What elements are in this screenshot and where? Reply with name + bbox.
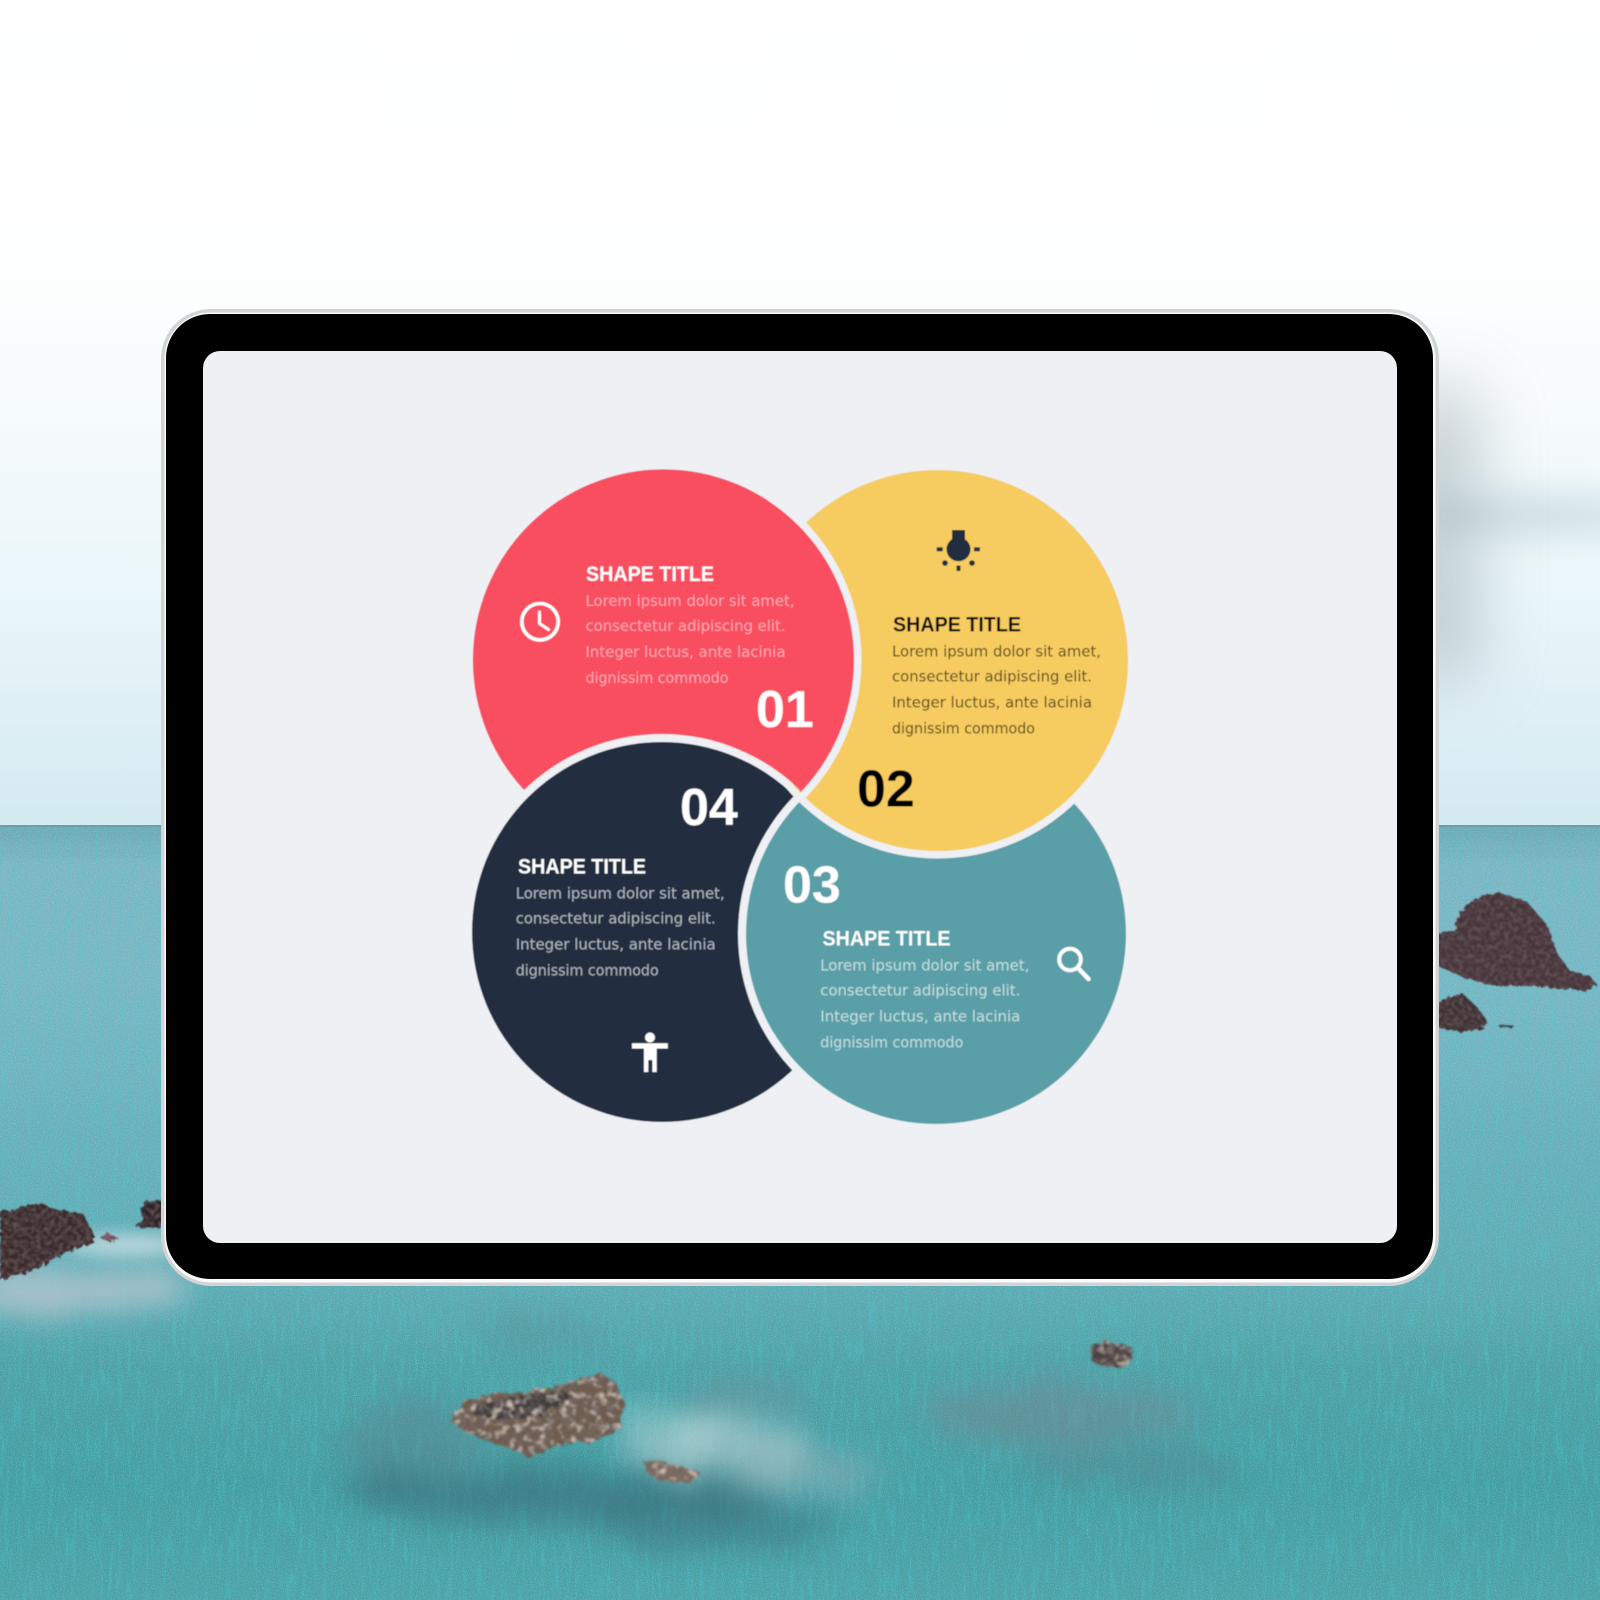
body text 03 <box>820 957 1029 1052</box>
sea gradient <box>0 825 1600 1600</box>
distant water band <box>0 852 1600 856</box>
number 04: 04 <box>680 779 738 837</box>
icon: clock <box>522 604 558 640</box>
number 02: 02 <box>857 760 915 818</box>
body text 03: dignissim commodo <box>820 1034 963 1052</box>
body text 03: Integer luctus, ante lacinia <box>820 1008 1020 1026</box>
section 04 content <box>516 779 738 1072</box>
body text 04: Lorem ipsum dolor sit amet, <box>516 885 725 903</box>
device outer rim <box>161 309 1439 1286</box>
body text 01: consectetur adipiscing elit. <box>586 617 786 635</box>
body text 02: dignissim commodo <box>892 720 1035 738</box>
body text 04: Integer luctus, ante lacinia <box>516 936 716 954</box>
title 04: SHAPE TITLE <box>518 856 646 879</box>
water mist and shadows <box>0 1234 1240 1551</box>
body text 02: consectetur adipiscing elit. <box>892 668 1092 686</box>
rocks: left shore <box>0 1200 162 1280</box>
section 02 content <box>857 530 1101 818</box>
body text 03: consectetur adipiscing elit. <box>820 982 1020 1000</box>
body text 01: Integer luctus, ante lacinia <box>586 643 786 661</box>
body text 01 <box>586 592 794 687</box>
circle 01 base <box>473 470 854 850</box>
icon: light bulb <box>937 530 980 571</box>
body text 02: Integer luctus, ante lacinia <box>892 694 1092 712</box>
number 01: 01 <box>756 681 814 739</box>
device inner rim <box>164 312 1436 1282</box>
body text 04: consectetur adipiscing elit. <box>516 910 716 928</box>
circle 02 base <box>740 462 1136 858</box>
rocks: central foreground <box>450 1341 1132 1482</box>
body text 04 <box>516 885 725 980</box>
horizon line <box>0 825 1600 827</box>
circle 03 base <box>738 736 1134 1132</box>
rocks: right shore <box>1438 892 1596 1032</box>
device bezel <box>166 314 1433 1279</box>
section 03 content <box>783 856 1088 1052</box>
body text 01: Lorem ipsum dolor sit amet, <box>586 592 794 610</box>
body text 04: dignissim commodo <box>516 962 659 980</box>
fog band and device shadow on the right <box>1400 390 1600 680</box>
background: misty sea photograph <box>0 337 1600 1600</box>
body text 01: dignissim commodo <box>586 669 728 687</box>
circle 01 overlap above circle 02 <box>738 500 862 798</box>
body text 02: Lorem ipsum dolor sit amet, <box>892 642 1101 660</box>
water texture <box>0 827 1600 1600</box>
body text 03: Lorem ipsum dolor sit amet, <box>820 957 1029 975</box>
title 02: SHAPE TITLE <box>893 614 1021 636</box>
icon: magnifying glass <box>1059 949 1088 979</box>
icon: person <box>632 1032 668 1072</box>
sky gradient <box>0 0 1600 826</box>
number 03: 03 <box>783 856 841 914</box>
title 03: SHAPE TITLE <box>822 928 950 951</box>
four interlocking circles diagram <box>464 462 1136 1132</box>
tablet device <box>161 309 1439 1286</box>
section 01 content <box>522 563 814 739</box>
circle 04 base <box>464 734 860 1130</box>
title 01: SHAPE TITLE <box>586 563 714 586</box>
device screen <box>203 351 1397 1243</box>
body text 02 <box>892 642 1101 738</box>
